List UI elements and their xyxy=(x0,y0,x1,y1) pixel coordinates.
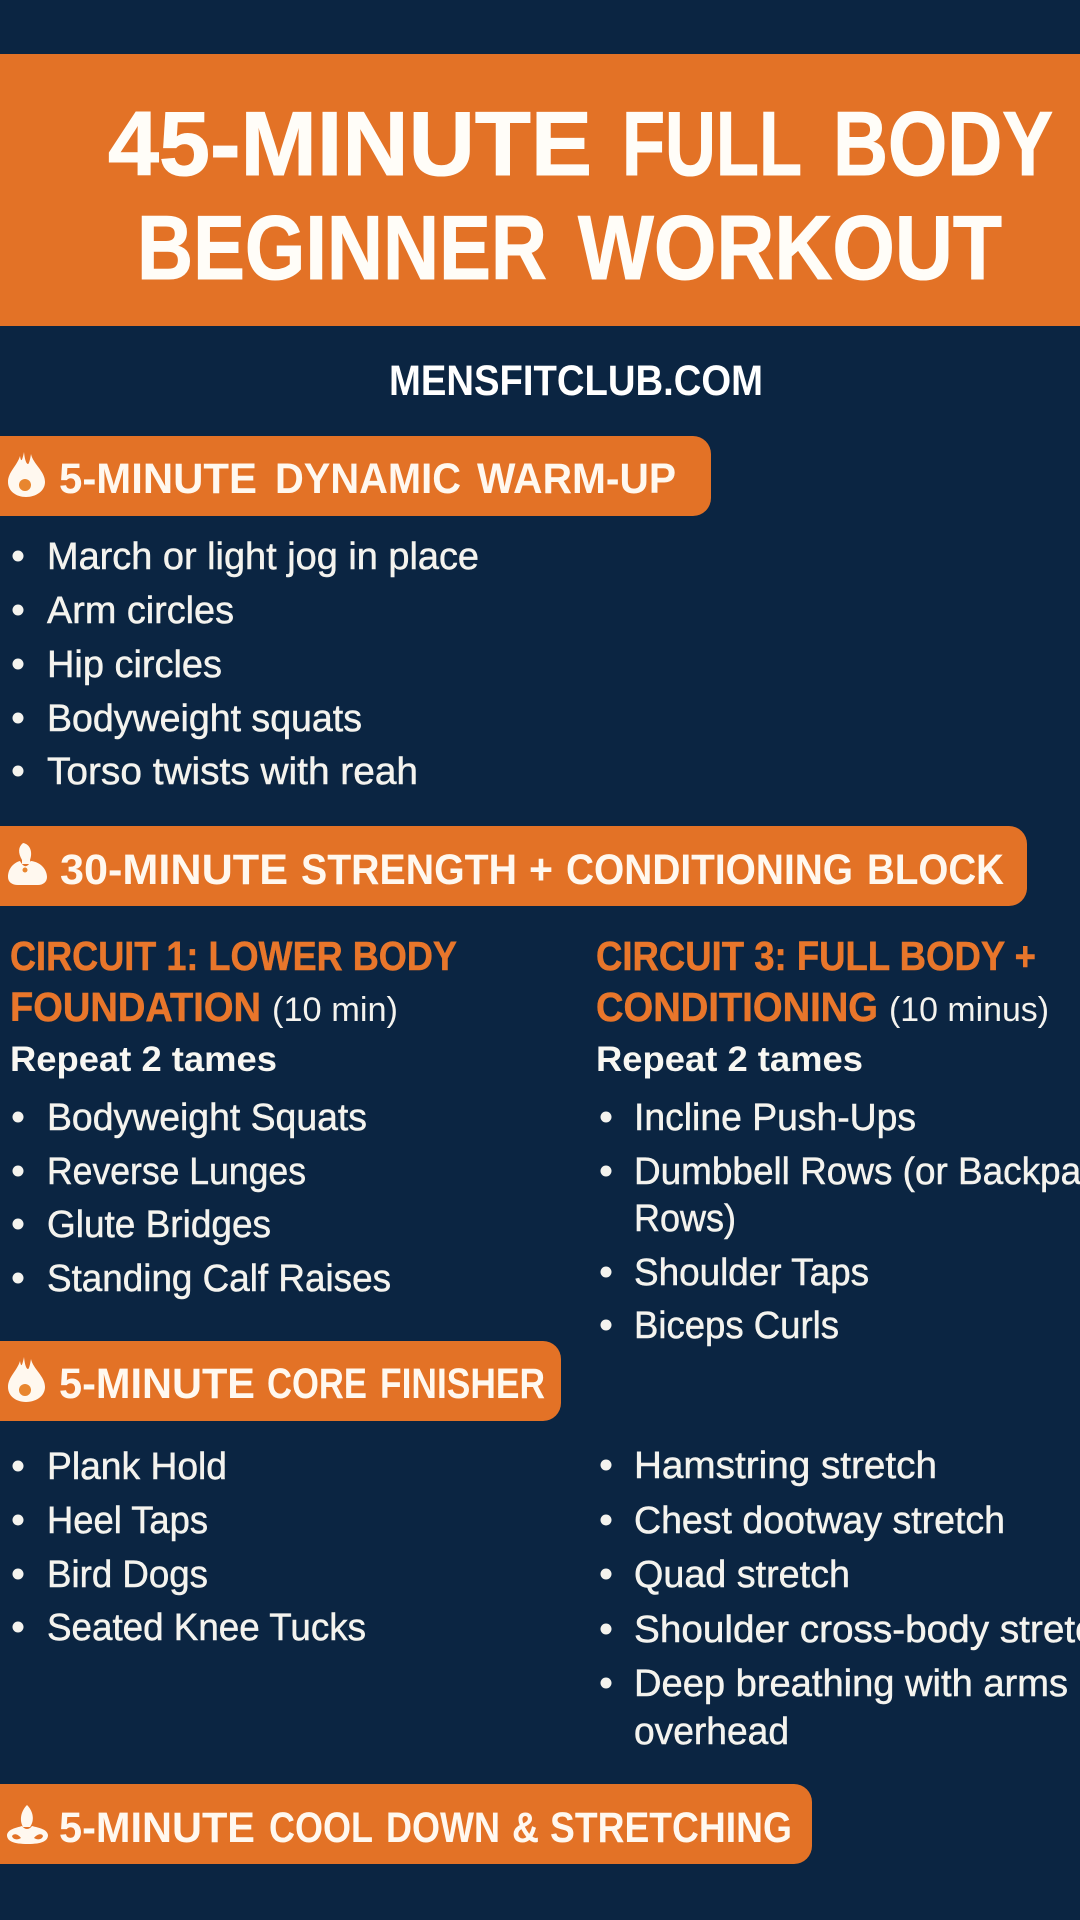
warm-up list xyxy=(12,536,479,793)
circuit 3 heading xyxy=(596,933,1049,1030)
icon: flame xyxy=(8,1357,45,1402)
circuit 1 list: Bodyweight Squats xyxy=(47,1097,367,1139)
stretching list: Chest dootway stretch xyxy=(634,1500,1005,1542)
core finisher list: Seated Knee Tucks xyxy=(47,1607,366,1649)
header text: 5-MINUTE xyxy=(59,455,257,503)
section header: cool down xyxy=(0,1784,812,1864)
stretching list: overhead xyxy=(634,1711,789,1753)
header text: CORE xyxy=(267,1360,367,1408)
circuit 1 heading: FOUNDATION xyxy=(10,984,261,1030)
header text: + xyxy=(529,846,553,894)
header text: WARM-UP xyxy=(477,455,676,503)
circuit 1 heading xyxy=(10,933,457,1030)
circuit 3 list xyxy=(600,1097,1080,1347)
stretching list xyxy=(600,1445,1080,1753)
title: 45-MINUTE xyxy=(108,94,592,195)
header text: COOL xyxy=(269,1804,373,1852)
core finisher list xyxy=(12,1446,366,1649)
warm-up list: Arm circles xyxy=(47,590,234,632)
warm-up list: Torso twists with reah xyxy=(47,751,418,793)
section header: warm-up xyxy=(0,436,711,516)
circuit 1 list: Glute Bridges xyxy=(47,1204,271,1246)
icon: cool-down figure xyxy=(7,1805,48,1844)
header text: CONDITIONING xyxy=(566,846,853,894)
title: WORKOUT xyxy=(578,198,1002,299)
title banner xyxy=(0,54,1080,326)
core finisher list: Plank Hold xyxy=(47,1446,227,1488)
core finisher list: Bird Dogs xyxy=(47,1554,208,1596)
circuit 3 list: Biceps Curls xyxy=(634,1305,839,1347)
circuit 1 list xyxy=(12,1097,391,1300)
warm-up list: March or light jog in place xyxy=(47,536,479,578)
header text: STRETCHING xyxy=(550,1804,792,1852)
circuit 1 repeat note: Repeat 2 tames xyxy=(10,1040,277,1079)
title xyxy=(108,94,1053,299)
core finisher list: Heel Taps xyxy=(47,1500,208,1542)
stretching list: Deep breathing with arms xyxy=(634,1663,1068,1705)
stretching list: Hamstring stretch xyxy=(634,1445,937,1487)
stretching list: Quad stretch xyxy=(634,1554,850,1596)
circuit 3 heading: CONDITIONING xyxy=(596,984,878,1030)
header text: DYNAMIC xyxy=(275,455,461,503)
header text: FINISHER xyxy=(380,1360,545,1408)
circuit 1 heading: CIRCUIT 1: LOWER BODY xyxy=(10,933,457,979)
title: FULL xyxy=(622,94,802,195)
title: BEGINNER xyxy=(137,198,547,299)
header text: 5-MINUTE xyxy=(59,1360,255,1408)
section header: strength block xyxy=(0,826,1027,906)
circuit 3 heading: (10 minus) xyxy=(889,991,1049,1029)
header text xyxy=(59,455,676,503)
header text xyxy=(59,1360,545,1408)
section header: core finisher xyxy=(0,1341,561,1421)
header text xyxy=(60,846,1004,894)
header text: STRENGTH xyxy=(301,846,517,894)
header text: 5-MINUTE xyxy=(59,1804,255,1852)
circuit 3 list: Rows) xyxy=(634,1198,736,1240)
warm-up list: Bodyweight squats xyxy=(47,698,362,740)
circuit 1 list: Standing Calf Raises xyxy=(47,1258,391,1300)
header text: DOWN xyxy=(386,1804,500,1852)
circuit 3 list: Incline Push-Ups xyxy=(634,1097,916,1139)
circuit 3 repeat note: Repeat 2 tames xyxy=(596,1040,863,1079)
icon: stretching figure xyxy=(8,843,47,885)
warm-up list: Hip circles xyxy=(47,644,222,686)
circuit 1 list: Reverse Lunges xyxy=(47,1151,306,1193)
header text xyxy=(59,1804,792,1852)
header text: BLOCK xyxy=(867,846,1004,894)
website subtitle: MENSFITCLUB.COM xyxy=(389,357,763,405)
icon: flame xyxy=(8,452,45,497)
circuit 1 heading: (10 min) xyxy=(272,991,398,1029)
circuit 3 list: Shoulder Taps xyxy=(634,1252,869,1294)
header text: & xyxy=(512,1804,539,1852)
circuit 3 heading: CIRCUIT 3: FULL BODY + xyxy=(596,933,1036,979)
header text: 30-MINUTE xyxy=(60,846,288,894)
